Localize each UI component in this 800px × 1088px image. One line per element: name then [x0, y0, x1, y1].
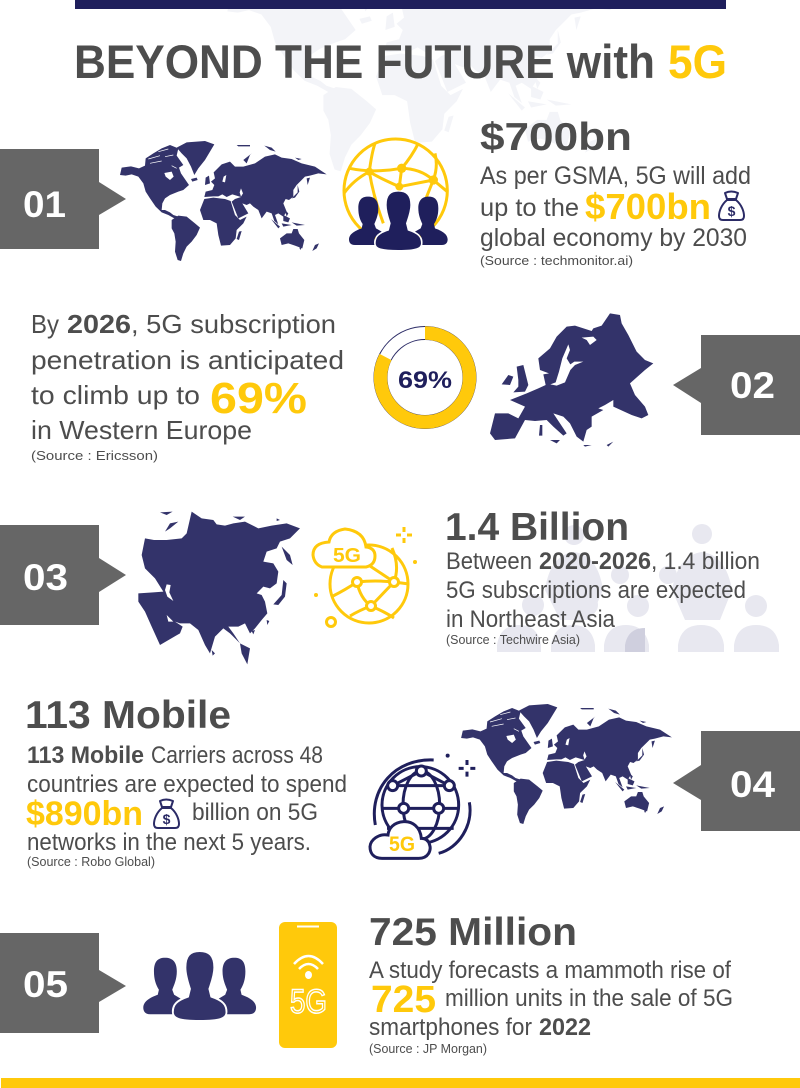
text: 113 mobile: countries are expected to spend	[27, 771, 347, 798]
text: 2026 penetration: , 5G subscription	[131, 309, 336, 339]
panel: 02 western europe	[31, 309, 800, 463]
number badge 03: 03	[23, 557, 68, 598]
text: 113 mobile: 113 Mobile	[25, 694, 231, 737]
icon: 5G network globe	[370, 754, 475, 858]
bottom bar	[1, 1078, 800, 1088]
icon: people	[143, 951, 256, 1021]
number badge 03	[0, 525, 126, 625]
text: 1.4 billion: , 1.4 billion	[651, 548, 760, 575]
text: 113 mobile: billion on 5G	[192, 799, 318, 826]
icon: money bag: $	[163, 811, 171, 827]
text: 2026 penetration	[31, 309, 344, 463]
text: 725 million: 725 Million	[369, 911, 577, 954]
text: 725 million: million units in the sale of 5G	[445, 985, 733, 1012]
text: 113 mobile: (Source : Robo Global)	[27, 855, 155, 869]
number badge 04	[673, 731, 800, 831]
text: 1.4 billion	[445, 506, 760, 647]
icon: europe map	[490, 313, 653, 447]
text: $700bn: global economy by 2030	[480, 224, 747, 252]
text: 1.4 billion: Between	[446, 548, 532, 575]
title: BEYOND THE FUTURE with	[74, 35, 655, 88]
text: 1.4 billion: (Source : Techwire Asia)	[446, 633, 580, 647]
icon: 5G smartphone: 5G	[290, 983, 327, 1021]
icon: asia map	[138, 512, 300, 664]
text: 725 million: smartphones for	[369, 1014, 532, 1041]
text: 2026 penetration: 69%	[210, 374, 307, 423]
text: 725 million: 725	[371, 979, 436, 1021]
background world map watermark	[227, 0, 612, 171]
text: 2026 penetration: 2026	[67, 309, 131, 339]
panel: 04 mobile carriers	[25, 694, 800, 869]
panel: 01 economy	[0, 116, 751, 268]
text: 1.4 billion: 1.4 Billion	[445, 506, 629, 549]
icon: crowd watermark	[497, 524, 779, 652]
text: 1.4 billion: 5G subscriptions are expected	[446, 577, 746, 604]
text: 2026 penetration: By	[31, 309, 59, 339]
text: $700bn: $700bn	[585, 186, 711, 227]
top bar	[75, 0, 726, 9]
panel: 05 smartphones	[0, 911, 733, 1056]
text: 725 million	[369, 911, 733, 1056]
number badge 02: 02	[730, 365, 775, 406]
text: 113 mobile: $890bn	[26, 795, 143, 833]
text: 2026 penetration: penetration is anticipated	[31, 345, 344, 375]
text: 725 million: 2022	[539, 1014, 591, 1041]
text: 1.4 billion: in Northeast Asia	[446, 606, 616, 633]
panel: 03 northeast asia	[0, 506, 779, 664]
number badge 05: 05	[23, 964, 68, 1005]
text: 1.4 billion: 2020-2026	[539, 548, 651, 575]
icon: world map	[461, 704, 672, 824]
icon: money bag	[719, 192, 744, 220]
number badge 05	[0, 933, 126, 1033]
icon: 5G cloud globe	[313, 527, 417, 626]
text: 725 million: A study forecasts a mammoth rise of	[369, 957, 731, 984]
text: 725 million: (Source : JP Morgan)	[369, 1042, 487, 1056]
text: $700bn: As per GSMA, 5G will add	[480, 162, 751, 190]
text: 113 mobile: Carriers across 48	[151, 742, 323, 769]
text: 113 mobile: networks in the next 5 years.	[27, 829, 311, 856]
number badge 02	[673, 335, 800, 435]
icon: globe network with people	[344, 139, 448, 251]
text: $700bn: up to the	[480, 194, 579, 222]
number badge 04: 04	[730, 764, 775, 805]
donut chart 69%: 69%	[398, 367, 452, 394]
text: $700bn: $700bn	[480, 116, 632, 159]
text: 2026 penetration: to climb up to	[31, 380, 200, 410]
donut chart 69%	[374, 326, 476, 428]
text: $700bn: (Source : techmonitor.ai)	[480, 253, 633, 268]
title: 5G	[668, 35, 727, 88]
number badge 01	[0, 149, 126, 249]
icon: world map	[120, 141, 327, 261]
text: 113 mobile	[25, 694, 347, 869]
text: $700bn	[480, 116, 751, 268]
label: 5G on cloud: 5G	[389, 833, 415, 856]
icon: 5G smartphone	[279, 922, 337, 1048]
icon: 5G cloud globe: 5G	[333, 545, 361, 567]
text: 2026 penetration: (Source : Ericsson)	[31, 448, 158, 463]
icon: money bag	[154, 800, 179, 828]
text: 2026 penetration: in Western Europe	[31, 415, 252, 445]
number badge 01: 01	[23, 184, 66, 225]
icon: money bag: $	[728, 203, 736, 219]
text: 113 mobile: 113 Mobile	[27, 742, 144, 769]
